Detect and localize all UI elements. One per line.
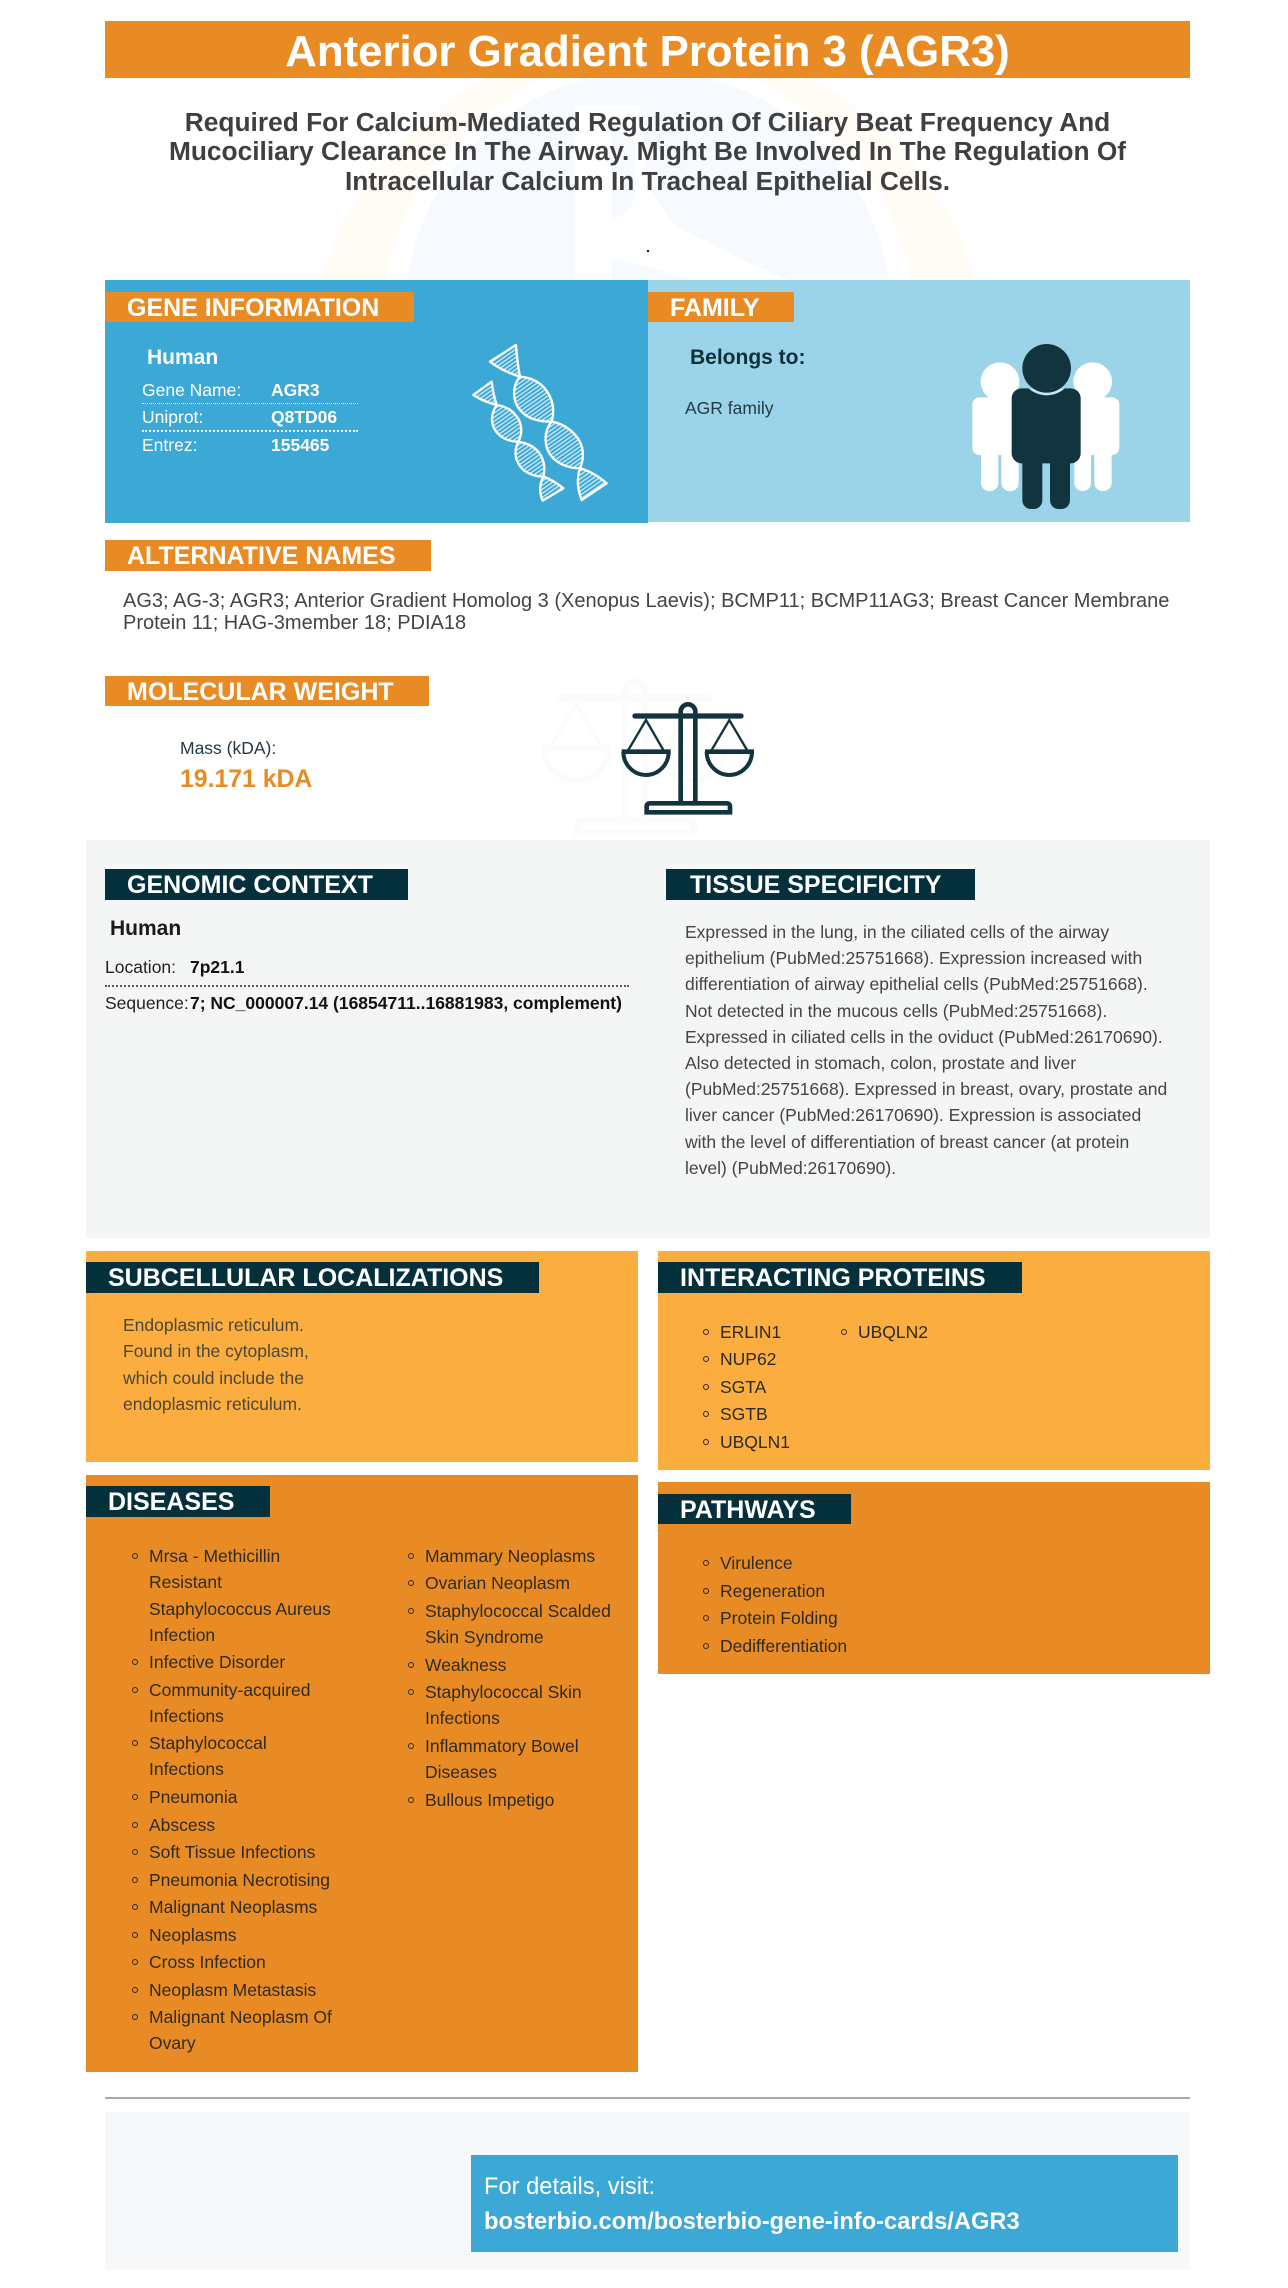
tissue specificity text: Expressed in ciliated cells in the oviduct (PubMed:26170690). (685, 1027, 1163, 1047)
disease list column one: Pneumonia Necrotising (149, 1870, 330, 1890)
heading: diseases (86, 1486, 270, 1517)
protein list: UBQLN2 (858, 1322, 928, 1342)
protein list: NUP62 (720, 1349, 776, 1369)
tissue specificity text: with the level of differentiation of breast cancer (at protein (685, 1132, 1129, 1152)
alternative names text: AG3; AG-3; AGR3; Anterior Gradient Homolog 3 (Xenopus Laevis); BCMP11; BCMP11AG3; Breast Cancer Membrane (123, 590, 1169, 612)
pathway list: Dedifferentiation (720, 1636, 847, 1656)
background watermark logo (320, 78, 976, 280)
disease list column one: Infective Disorder (149, 1652, 285, 1672)
disease list column one: Ovary (149, 2033, 196, 2053)
callout: details link (471, 2155, 1178, 2252)
chromosome location (105, 957, 244, 977)
mass value: 19.171 kDA (180, 766, 312, 793)
disease list column one: Mrsa - Methicillin (149, 1546, 280, 1566)
tissue specificity text: (PubMed:25751668). Expressed in breast, ovary, prostate and (685, 1079, 1167, 1099)
panel: subcellular localizations (86, 1251, 638, 1462)
heading: molecular weight: MOLECULAR WEIGHT (127, 678, 394, 706)
disease list column one: Cross Infection (149, 1952, 266, 1972)
disease list column two: Skin Syndrome (425, 1627, 544, 1647)
subcellular text: which could include the (123, 1368, 304, 1388)
title banner: Anterior Gradient Protein 3 (AGR3) (285, 27, 1010, 76)
gene identifier table: Entrez: (142, 435, 197, 455)
genomic sequence: Sequence: (105, 993, 189, 1013)
disease list column one: Infections (149, 1706, 224, 1726)
heading: alternative names: ALTERNATIVE NAMES (127, 542, 396, 570)
pathway list: Virulence (720, 1553, 793, 1573)
panel: footer (105, 2112, 1190, 2270)
title banner (105, 21, 1190, 78)
tissue specificity text: differentiation of airway epithelial cells (PubMed:25751668). (685, 974, 1148, 994)
disease list column two: Diseases (425, 1762, 497, 1782)
tissue specificity text: Expressed in the lung, in the ciliated cells of the airway (685, 922, 1109, 942)
disease list column two: Mammary Neoplasms (425, 1546, 595, 1566)
tissue specificity text: epithelium (PubMed:25751668). Expression increased with (685, 948, 1142, 968)
disease list column two: Ovarian Neoplasm (425, 1573, 570, 1593)
panel: gene information (105, 280, 648, 523)
species label: Human (147, 346, 218, 369)
species label: Human (110, 917, 181, 940)
disease list column one: Pneumonia (149, 1787, 238, 1807)
small dot (647, 250, 649, 252)
disease list column one: Malignant Neoplasms (149, 1897, 317, 1917)
heading: gene information: GENE INFORMATION (127, 294, 379, 322)
protein list: SGTA (720, 1377, 766, 1397)
disease list column one: Neoplasms (149, 1925, 237, 1945)
subtitle description: Intracellular Calcium In Tracheal Epithelial Cells. (345, 166, 950, 196)
family name: AGR family (685, 398, 773, 418)
subtitle description: Mucociliary Clearance In The Airway. Might Be Involved In The Regulation Of (169, 136, 1126, 166)
panel: family (648, 280, 1190, 522)
disease list column two: Weakness (425, 1655, 506, 1675)
heading: interacting proteins: INTERACTING PROTEINS (680, 1264, 986, 1292)
disease list column one: Infections (149, 1759, 224, 1779)
details label: For details, visit: (484, 2174, 655, 2200)
heading: subcellular localizations: SUBCELLULAR LOCALIZATIONS (108, 1264, 503, 1292)
gene identifier table: AGR3 (271, 380, 320, 400)
gene identifier table: Uniprot: (142, 407, 203, 427)
gene identifier table: Q8TD06 (271, 407, 337, 427)
disease list column one: Malignant Neoplasm Of (149, 2007, 332, 2027)
disease list column one: Staphylococcus Aureus (149, 1599, 331, 1619)
chromosome location: 7p21.1 (190, 957, 244, 977)
disease list column one (132, 1546, 332, 2053)
gene identifier table: Gene Name: (142, 380, 241, 400)
disease list column two: Staphylococcal Skin (425, 1682, 582, 1702)
disease list column one: Soft Tissue Infections (149, 1842, 315, 1862)
subcellular text: Endoplasmic reticulum. (123, 1315, 304, 1335)
chromosome location: Location: (105, 957, 176, 977)
disease list column one: Resistant (149, 1572, 222, 1592)
panel: interacting proteins (658, 1251, 1210, 1470)
pathway list: Protein Folding (720, 1608, 838, 1628)
disease list column two: Staphylococcal Scalded (425, 1601, 611, 1621)
heading: family (648, 292, 794, 322)
subcellular text: Found in the cytoplasm, (123, 1341, 309, 1361)
gene identifier table: 155465 (271, 435, 329, 455)
pathway list (703, 1553, 847, 1656)
protein list: ERLIN1 (720, 1322, 781, 1342)
heading: pathways (658, 1494, 851, 1524)
heading: genomic context: GENOMIC CONTEXT (127, 871, 373, 899)
panel: genomic context and tissue specificity (86, 840, 1210, 1238)
belongs to label: Belongs to: (690, 346, 806, 369)
tissue specificity text: Not detected in the mucous cells (PubMed:25751668). (685, 1001, 1107, 1021)
mass label: Mass (kDA): (180, 738, 276, 758)
alternative names text (123, 590, 1169, 634)
gene identifier table (142, 380, 358, 455)
pathway list: Regeneration (720, 1581, 825, 1601)
details URL: bosterbio.com/bosterbio-gene-info-cards/AGR3 (484, 2209, 1020, 2235)
disease list column two (408, 1546, 611, 1810)
disease list column two: Bullous Impetigo (425, 1790, 554, 1810)
icon: group of people (972, 344, 1120, 509)
panel: diseases (86, 1475, 638, 2072)
subcellular text: endoplasmic reticulum. (123, 1394, 302, 1414)
heading: pathways: PATHWAYS (680, 1496, 816, 1524)
icon: DNA helix (472, 344, 608, 502)
genomic sequence: 7; NC_000007.14 (16854711..16881983, complement) (190, 993, 622, 1013)
disease list column two: Inflammatory Bowel (425, 1736, 579, 1756)
tissue specificity text (685, 922, 1167, 1178)
disease list column one: Staphylococcal (149, 1733, 267, 1753)
tissue specificity text: liver cancer (PubMed:26170690). Expression is associated (685, 1105, 1141, 1125)
protein list (703, 1322, 928, 1452)
subtitle description: Required For Calcium-Mediated Regulation Of Ciliary Beat Frequency And (185, 107, 1110, 137)
heading: tissue specificity: TISSUE SPECIFICITY (690, 871, 941, 899)
heading: family: FAMILY (670, 294, 759, 322)
tissue specificity text: level) (PubMed:26170690). (685, 1158, 896, 1178)
alternative names text: Protein 11; HAG-3member 18; PDIA18 (123, 612, 466, 634)
icon: balance scales with ghost (621, 702, 754, 815)
protein list: SGTB (720, 1404, 768, 1424)
disease list column one: Community-acquired (149, 1680, 310, 1700)
tissue specificity text: Also detected in stomach, colon, prostate and liver (685, 1053, 1076, 1073)
protein list: UBQLN1 (720, 1432, 790, 1452)
disease list column one: Neoplasm Metastasis (149, 1980, 316, 2000)
disease list column one: Abscess (149, 1815, 215, 1835)
panel: pathways (658, 1482, 1210, 1674)
heading: diseases: DISEASES (108, 1488, 234, 1516)
disease list column one: Infection (149, 1625, 215, 1645)
disease list column two: Infections (425, 1708, 500, 1728)
subtitle description (169, 107, 1126, 196)
subcellular text (123, 1315, 309, 1414)
